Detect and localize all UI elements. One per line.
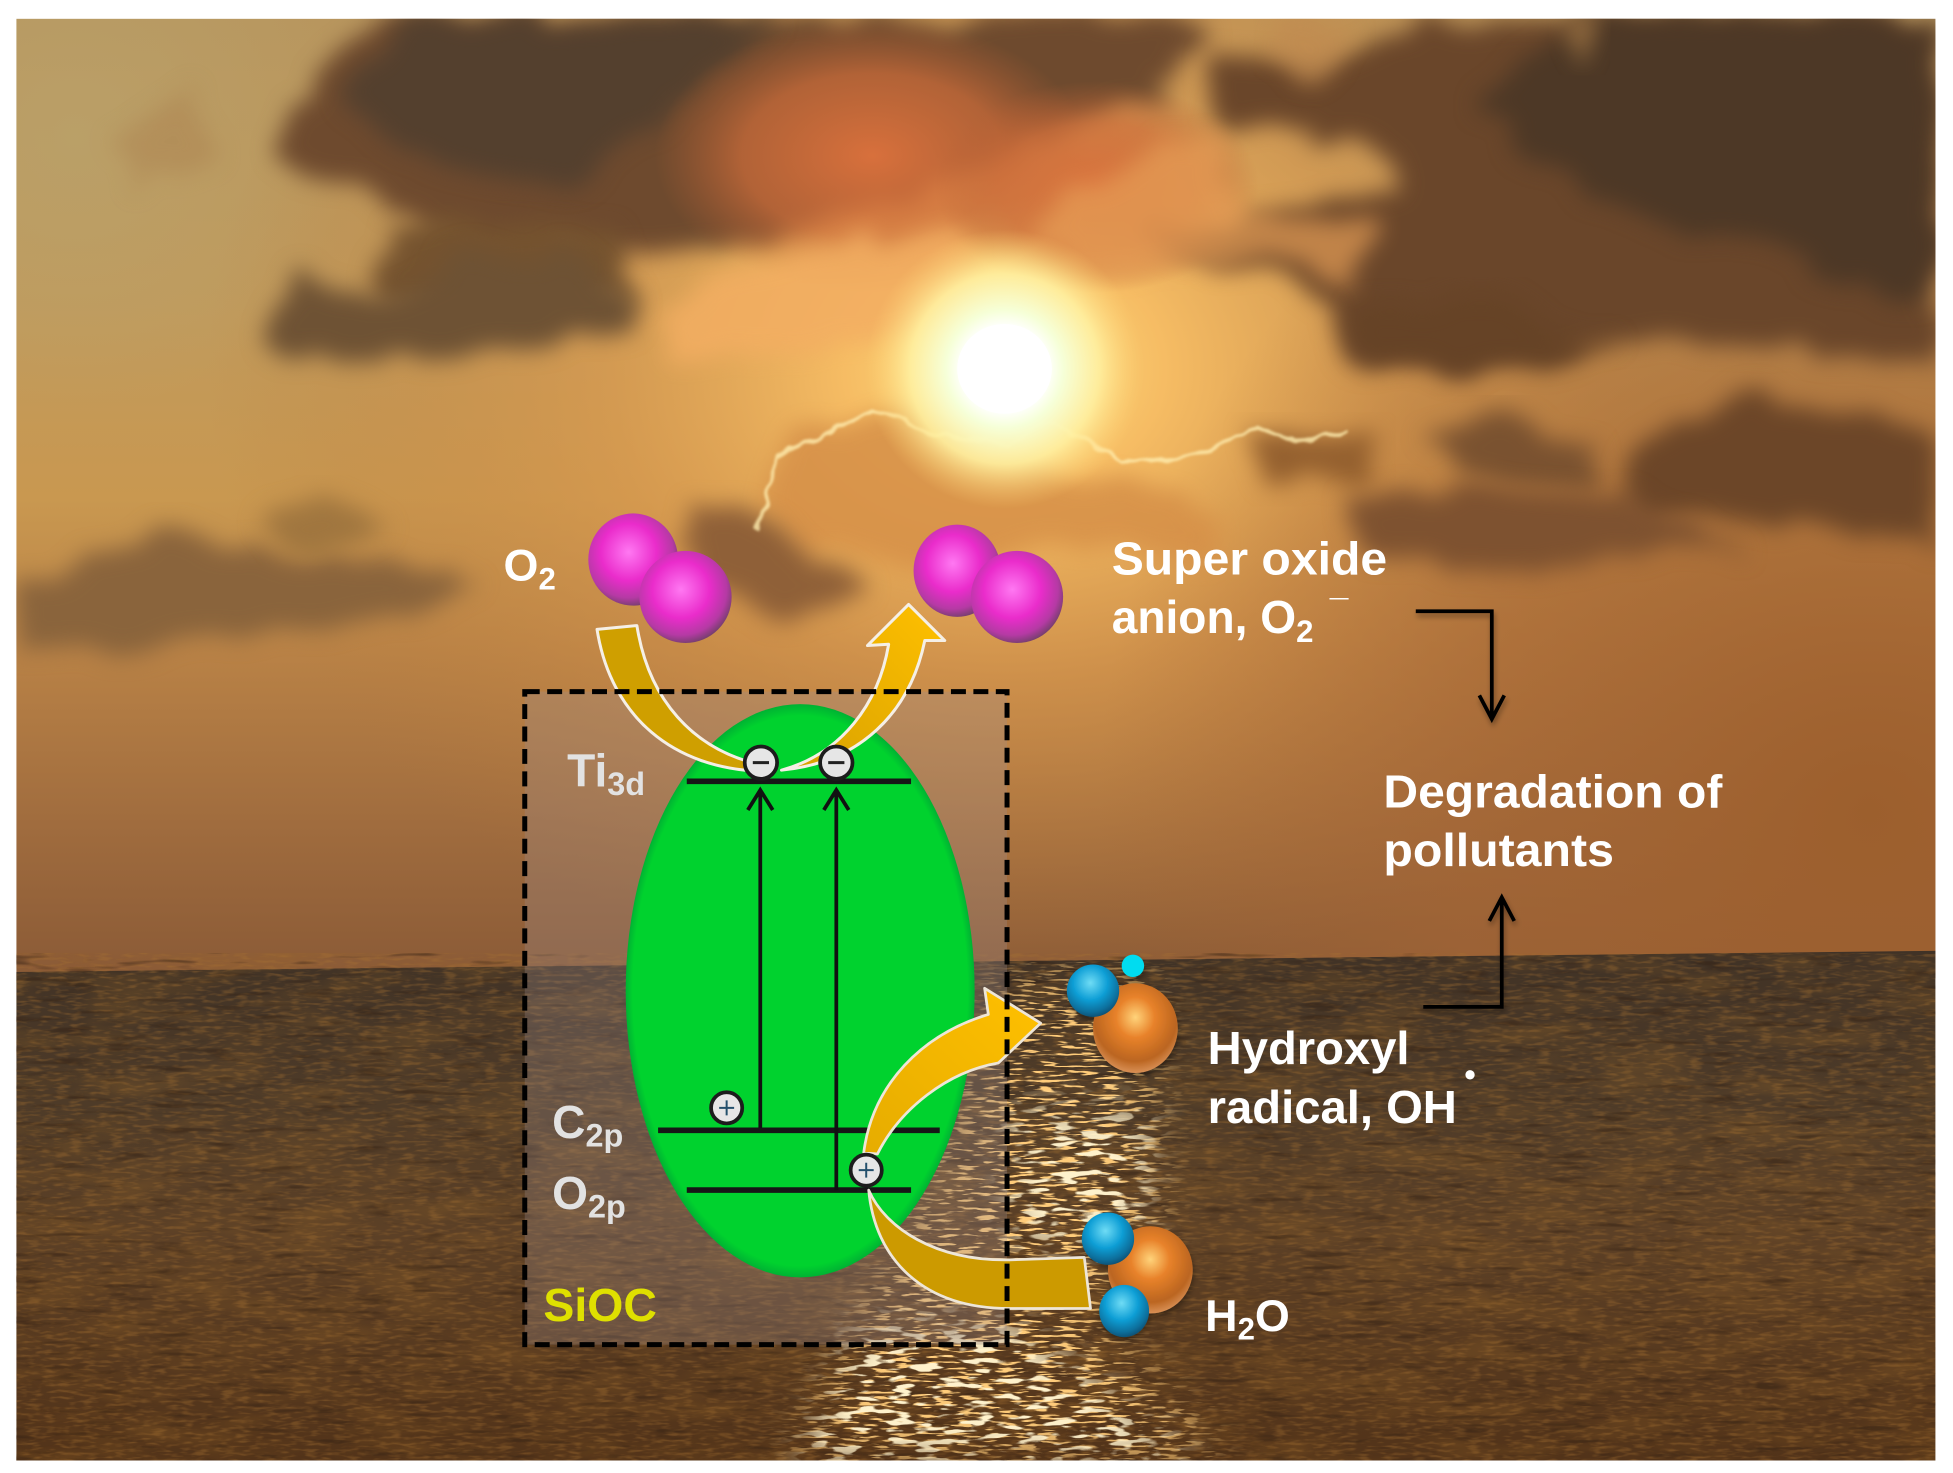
dark clouds xyxy=(106,19,1935,380)
electron 1 xyxy=(745,746,777,779)
hole 2 xyxy=(851,1155,882,1186)
label: superoxide anion: anion, O xyxy=(1112,591,1296,643)
molecule: water xyxy=(1082,1213,1193,1337)
label: O2p: O xyxy=(552,1167,588,1219)
label: superoxide anion: 2 xyxy=(1296,614,1313,649)
glow inside clouds xyxy=(654,19,1383,361)
ellipse: SiOC band structure body xyxy=(626,704,975,1277)
arrow: C2p to Ti3d excitation xyxy=(748,790,773,1128)
yellow arrow: water to hole xyxy=(869,1190,1091,1309)
label: superoxide anion: Super oxide xyxy=(1112,532,1387,584)
label: O2p: 2p xyxy=(588,1189,626,1225)
arrow: O2p to Ti3d excitation xyxy=(824,790,849,1190)
label: O2: O xyxy=(504,540,538,591)
molecule: superoxide xyxy=(914,525,1063,643)
arrow: superoxide to degradation xyxy=(1416,611,1504,719)
hole 1 xyxy=(711,1092,742,1123)
label: hydroxyl radical xyxy=(1208,1022,1476,1133)
sea xyxy=(16,951,1935,1461)
molecule: O2 xyxy=(588,513,732,643)
yellow arrow: hole to hydroxyl radical xyxy=(864,988,1041,1154)
molecule: hydroxyl radical xyxy=(1067,955,1178,1073)
label: superoxide anion: ¯ xyxy=(1329,594,1349,631)
label: degradation of pollutants: pollutants xyxy=(1383,824,1614,876)
label: H2O: H xyxy=(1205,1290,1238,1341)
yellow arrow: electron to superoxide xyxy=(781,604,945,770)
label: degradation of pollutants: Degradation of xyxy=(1383,766,1723,818)
label: Ti3d: 3d xyxy=(607,766,645,802)
energy level: O2p xyxy=(687,1188,911,1192)
label: superoxide anion xyxy=(1112,532,1387,649)
arrow: hydroxyl radical to degradation xyxy=(1423,897,1514,1007)
label: H2O: 2 xyxy=(1238,1312,1255,1347)
label: hydroxyl radical: • xyxy=(1464,1056,1476,1092)
sun xyxy=(882,234,1127,502)
electron 2 xyxy=(820,746,853,779)
label: C2p: C xyxy=(552,1096,585,1148)
label: Ti3d: Ti xyxy=(567,744,607,796)
dashed box: SiOC region xyxy=(525,692,1007,1345)
energy level: Ti3d xyxy=(687,779,911,784)
tinted panel behind SiOC band diagram xyxy=(525,692,1007,1345)
label: O2: 2 xyxy=(538,561,556,596)
yellow arrow: O2 to electron xyxy=(597,626,763,771)
label: hydroxyl radical: radical, OH xyxy=(1208,1081,1457,1133)
label: degradation of pollutants xyxy=(1383,766,1723,876)
sky xyxy=(16,19,1935,978)
label: hydroxyl radical: Hydroxyl xyxy=(1208,1022,1410,1074)
energy level: C2p xyxy=(658,1128,940,1133)
label: H2O: O xyxy=(1255,1290,1290,1341)
label: C2p: 2p xyxy=(585,1117,623,1153)
bright cloud rim xyxy=(758,411,1346,530)
mid-level clouds below the sun xyxy=(19,399,1935,648)
label: SiOC: SiOC xyxy=(543,1279,657,1331)
